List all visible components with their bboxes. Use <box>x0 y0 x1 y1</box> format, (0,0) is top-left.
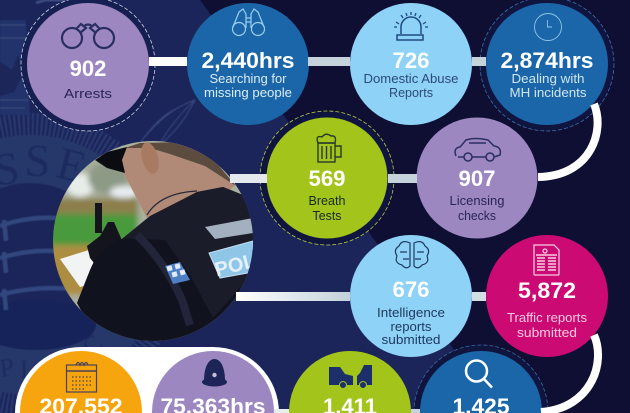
panel: missing people: Searching for <box>210 72 286 86</box>
panel: 1,425 <box>414 345 548 413</box>
panel: intelligence reports: submitted <box>382 333 441 347</box>
panel: arrests <box>21 0 155 131</box>
panel: licensing checks <box>416 118 538 238</box>
icon: car crash <box>329 365 372 388</box>
icon: calendar <box>66 362 96 392</box>
panel: arrests: 902 <box>70 56 106 81</box>
panel: intelligence reports: reports <box>390 320 432 334</box>
checker badge <box>165 262 190 284</box>
panel: licensing checks: 907 <box>458 166 496 191</box>
panel: missing people <box>187 3 309 125</box>
icon: clock <box>534 14 562 40</box>
icon: document <box>534 245 559 275</box>
icon: binoculars <box>232 9 264 36</box>
panel: intelligence reports: Intelligence <box>377 306 445 320</box>
panel: intelligence reports <box>350 235 472 357</box>
panel: domestic abuse <box>350 3 472 125</box>
torso <box>77 187 262 345</box>
panel: traffic reports: Traffic reports <box>507 311 587 325</box>
panel: intelligence reports: 676 <box>392 277 430 302</box>
panel: breath tests <box>260 111 394 245</box>
connector bars <box>149 57 598 413</box>
icon: handcuffs <box>62 24 114 48</box>
icon: brain <box>395 242 429 268</box>
panel: traffic reports: submitted <box>517 326 577 340</box>
watermark: police crest <box>0 0 195 406</box>
panel: 1,411 <box>289 351 411 413</box>
photo: police officer: POLI <box>213 249 263 281</box>
mesh vest <box>123 187 253 318</box>
hair and neck <box>118 143 235 218</box>
panel: domestic abuse: Reports <box>389 86 433 100</box>
watermark lettering: I <box>20 355 28 384</box>
strap <box>137 235 190 325</box>
radio <box>95 203 102 233</box>
watermark lettering: C <box>77 329 108 362</box>
cap <box>95 147 127 173</box>
icon: police helmet <box>202 359 227 386</box>
panel: MH incidents <box>480 0 614 131</box>
POLICE patch <box>209 241 253 278</box>
panel: white pill backing <box>15 347 279 413</box>
ear <box>141 142 159 174</box>
panel: MH incidents: 2,874hrs <box>500 48 594 73</box>
watermark lettering <box>0 135 108 384</box>
watermark lettering: S <box>24 135 51 186</box>
panel: missing people: 2,440hrs <box>202 48 294 73</box>
panel: traffic reports <box>486 235 608 357</box>
panel: breath tests: 569 <box>308 166 346 191</box>
panel: MH incidents: Dealing with <box>512 72 585 86</box>
icon: siren <box>394 12 428 40</box>
watermark lettering: E <box>52 137 92 193</box>
icon: beer mug <box>317 134 341 162</box>
panel: domestic abuse: Domestic Abuse <box>364 72 459 86</box>
silver patch <box>205 218 253 239</box>
panel: domestic abuse: 726 <box>392 48 430 73</box>
photo: police officer <box>53 141 253 341</box>
icon: car <box>455 138 500 161</box>
lanyard <box>147 191 197 215</box>
panel: breath tests: Tests <box>312 209 342 223</box>
photo background <box>53 141 253 341</box>
panel: 75,363hrs <box>152 351 274 413</box>
panel: licensing checks: checks <box>458 209 496 223</box>
panel: missing people: missing people <box>204 86 292 100</box>
icon: magnifier <box>466 360 492 388</box>
panel: MH incidents: MH incidents <box>510 86 586 100</box>
panel: traffic reports: 5,872 <box>518 278 576 303</box>
panel: licensing checks: Licensing <box>450 194 505 208</box>
panel: arrests: Arrests <box>64 87 112 101</box>
panel: breath tests: Breath <box>308 194 346 208</box>
panel: 207,552 <box>20 351 142 413</box>
